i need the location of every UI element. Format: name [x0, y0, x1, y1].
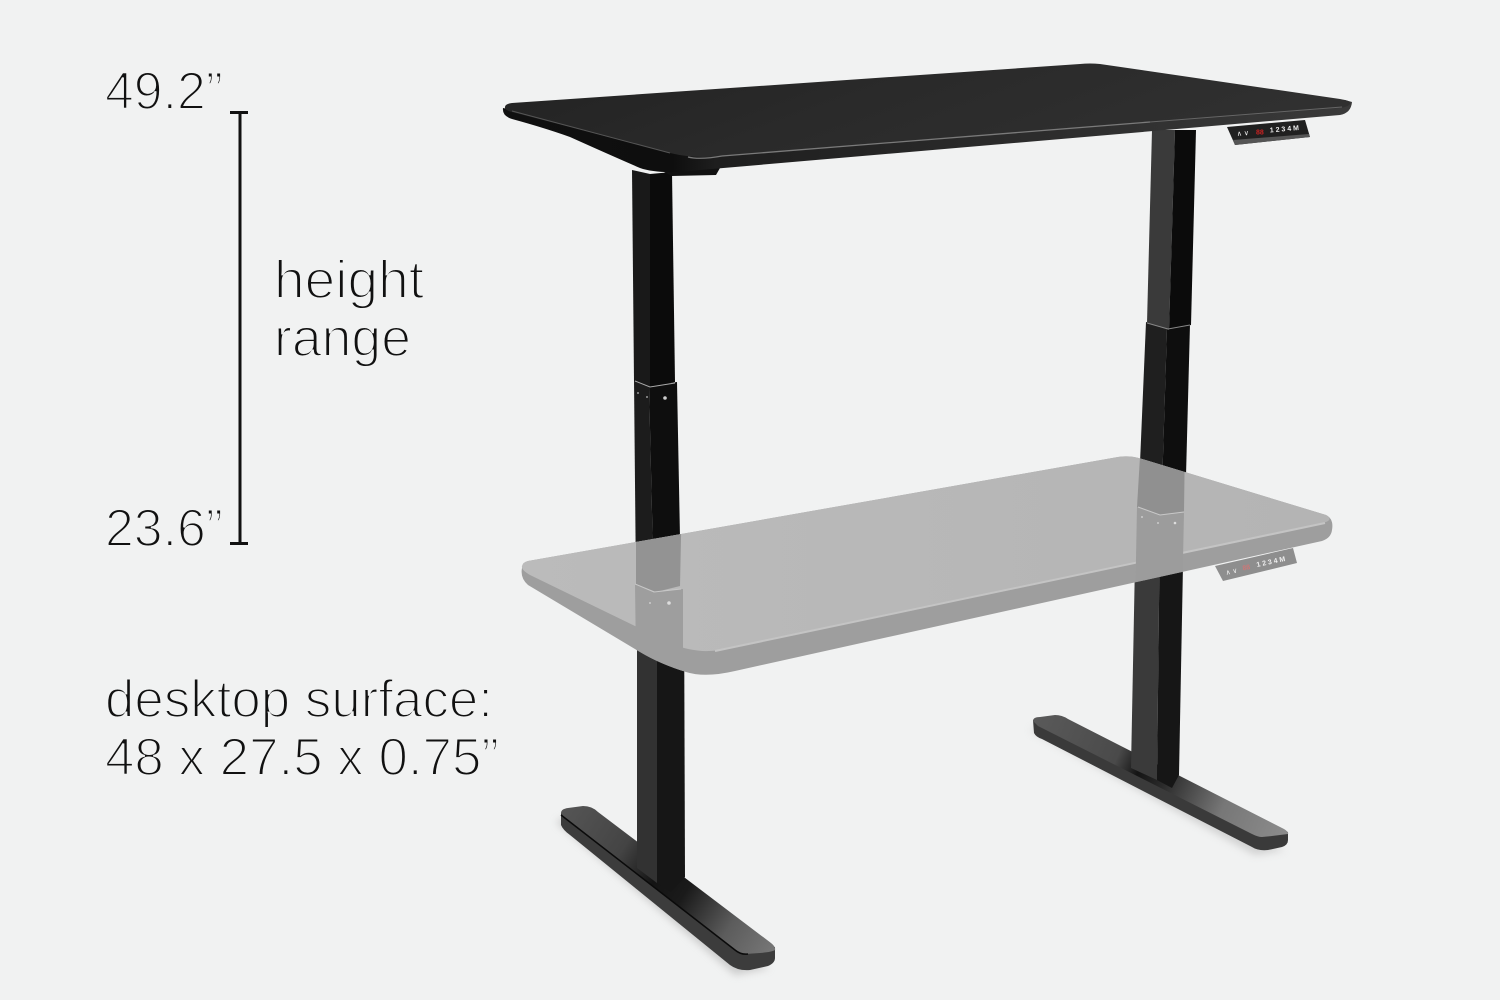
label: height range: height	[274, 250, 424, 310]
panel buttons: ∧ ∨	[1237, 130, 1249, 138]
desktop in raised position	[503, 64, 1352, 176]
right middle column	[1138, 322, 1167, 520]
panel display: 88	[1256, 130, 1264, 136]
panel presets: 1 2 3 4 M	[1270, 125, 1299, 134]
left middle column	[634, 380, 654, 596]
lowered panel display: 88	[1242, 564, 1251, 572]
desktop edge	[503, 100, 1352, 172]
label: height range: range	[274, 308, 411, 368]
label: desktop surface dimensions: 48 x 27.5 x 0.75”	[105, 728, 499, 787]
left foot shadow	[556, 815, 770, 975]
label: desktop surface dimensions: desktop surface:	[105, 670, 493, 729]
underside bracket	[660, 168, 720, 176]
left lower column	[637, 590, 657, 883]
heading: maximum height 49.2: 49.2”	[105, 62, 223, 121]
ghost top surface	[522, 456, 1330, 651]
ghost edge	[522, 456, 1332, 675]
left sleeve highlight	[635, 381, 675, 387]
front edge highlight	[688, 122, 1150, 158]
left foot	[561, 806, 775, 970]
left edge highlight	[512, 111, 670, 153]
lowered panel buttons: ∧ ∨	[1225, 568, 1238, 577]
control panel: raised	[1227, 120, 1310, 145]
ghost columns	[635, 458, 1184, 671]
right sleeve highlight	[1147, 323, 1190, 329]
label: minimum height 23.6: 23.6”	[105, 499, 223, 558]
desktop in lowered position (ghost)	[522, 440, 1332, 680]
left upper column	[632, 170, 650, 388]
right upper column	[1147, 130, 1175, 330]
height range bracket	[230, 111, 248, 545]
right foot shadow	[1030, 725, 1285, 855]
desktop top surface	[505, 64, 1350, 157]
ghost highlight	[715, 523, 1325, 651]
control panel: lowered	[1215, 548, 1297, 581]
right edge highlight	[1150, 107, 1342, 122]
lowered panel presets: 1 2 3 4 M	[1256, 556, 1286, 569]
desk frame: right leg and foot	[1030, 130, 1288, 855]
desk frame: left leg and foot	[556, 170, 775, 975]
right foot	[1033, 715, 1288, 850]
right lower column	[1131, 510, 1160, 780]
